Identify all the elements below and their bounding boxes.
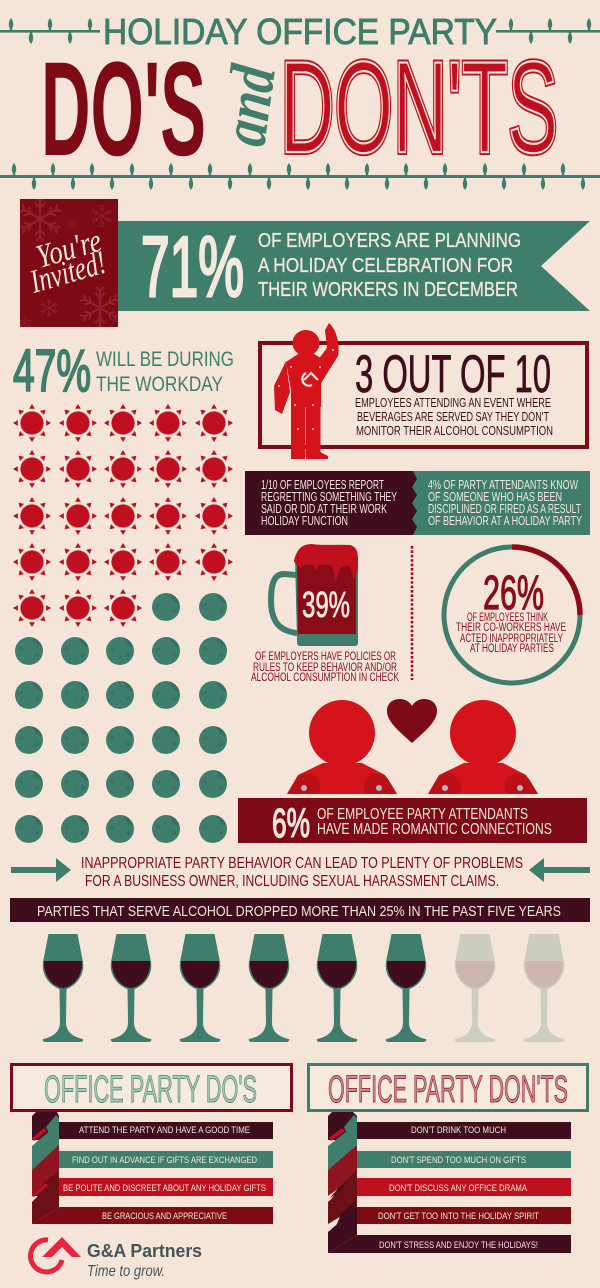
- chart: wine glasses: [43, 934, 564, 1042]
- panel: regret and discipline stats: REGRETTING SOMETHING THEY: [261, 490, 397, 504]
- text: mug caption: OF EMPLOYERS HAVE POLICIES OR: [255, 649, 396, 663]
- stat: 47 percent workday: THE WORKDAY: [96, 373, 223, 396]
- stat: 47 percent workday: 47%: [13, 338, 91, 404]
- title: holiday office party: HOLIDAY OFFICE PARTY: [103, 11, 497, 52]
- text: mug caption: ALCOHOL CONSUMPTION IN CHECK: [251, 670, 399, 684]
- invitation card: You're: [32, 223, 106, 276]
- logo: G&A Partners: Time to grow.: [87, 1263, 165, 1280]
- list: do's ribbon: ATTEND THE PARTY AND HAVE A GOOD TIME: [79, 1125, 250, 1136]
- panel: regret and discipline stats: [245, 471, 590, 535]
- icon: waving person: [274, 323, 339, 459]
- panel: regret and discipline stats: SAID OR DID AT THEIR WORK: [261, 502, 387, 516]
- chart: 26 percent ring: OF EMPLOYEES THINK: [467, 612, 548, 624]
- panel: do's heading: OFFICE PARTY DO'S: [44, 1069, 257, 1111]
- list: don'ts ribbon: DON'T SPEND TOO MUCH ON GIFTS: [391, 1155, 526, 1166]
- panel: regret and discipline stats: 1/10 OF EMPLOYEES REPORT: [261, 478, 384, 492]
- list: do's ribbon: FIND OUT IN ADVANCE IF GIFTS ARE EXCHANGED: [72, 1155, 257, 1166]
- banner: 71 percent ribbon: A HOLIDAY CELEBRATION FOR: [258, 255, 513, 277]
- banner: 71 percent ribbon: 71%: [141, 220, 244, 315]
- arrow: right: [529, 858, 590, 882]
- panel: do's heading: [12, 1064, 292, 1111]
- header string lights bottom: [0, 163, 600, 190]
- invitation card: Invited!: [26, 245, 110, 301]
- icon: beer mug 39 percent: [271, 544, 358, 646]
- stat: 47 percent workday: WILL BE DURING: [96, 348, 234, 371]
- title: and: and: [208, 60, 289, 150]
- panel: regret and discipline stats: HOLIDAY FUNCTION: [261, 514, 348, 528]
- banner: 6 percent romantic: OF EMPLOYEE PARTY ATTENDANTS: [317, 806, 528, 823]
- banner: alcohol parties dropped: [10, 898, 590, 922]
- list: don'ts ribbon: DON'T STRESS AND ENJOY THE HOLIDAYS!: [379, 1240, 538, 1251]
- panel: 3 out of 10: [260, 343, 587, 447]
- chart: 26 percent ring: [444, 547, 580, 683]
- icon: beer mug 39 percent: 39%: [302, 584, 350, 625]
- list: don'ts ribbon: DON'T GET TOO INTO THE HOLIDAY SPIRIT: [378, 1211, 539, 1222]
- stat: 47 percent workday: [13, 338, 234, 404]
- arrow: left: [11, 858, 71, 882]
- icon: couple and heart: [287, 699, 538, 794]
- header string lights top: [0, 18, 600, 44]
- banner: 71 percent ribbon: THEIR WORKERS IN DECEMBER: [258, 279, 518, 301]
- pictogram: 47 suns and 53 moons: [13, 404, 233, 843]
- chart: 26 percent ring: 26%: [483, 567, 544, 620]
- banner: 71 percent ribbon: OF EMPLOYERS ARE PLANNING: [258, 230, 521, 252]
- list: do's ribbon: BE POLITE AND DISCREET ABOUT ANY HOLIDAY GIFTS: [63, 1183, 266, 1194]
- text: inappropriate behavior warning: [81, 855, 523, 890]
- banner: 71 percent ribbon: [118, 220, 590, 315]
- logo: G&A Partners: G&A Partners: [87, 1241, 202, 1261]
- text: mug caption: [251, 649, 399, 684]
- invitation card: [18, 197, 120, 330]
- title: do's: DO'S: [41, 35, 206, 184]
- list: don'ts ribbon: DON'T DRINK TOO MUCH: [411, 1125, 506, 1136]
- logo: G&A Partners: [31, 1237, 202, 1280]
- list: don'ts ribbon: [328, 1112, 571, 1253]
- list: do's ribbon: BE GRACIOUS AND APPRECIATIVE: [102, 1211, 227, 1222]
- text: inappropriate behavior warning: FOR A BUSINESS OWNER, INCLUDING SEXUAL HARASSMENT CLAIMS.: [85, 873, 499, 890]
- chart: 26 percent ring: AT HOLIDAY PARTIES: [470, 643, 554, 655]
- list: do's ribbon: [32, 1112, 273, 1224]
- list: don'ts ribbon: DON'T DISCUSS ANY OFFICE DRAMA: [389, 1183, 528, 1194]
- banner: 6 percent romantic: 6%: [272, 800, 310, 846]
- banner: 6 percent romantic: [238, 798, 587, 846]
- text: mug caption: RULES TO KEEP BEHAVIOR AND/OR: [253, 660, 397, 674]
